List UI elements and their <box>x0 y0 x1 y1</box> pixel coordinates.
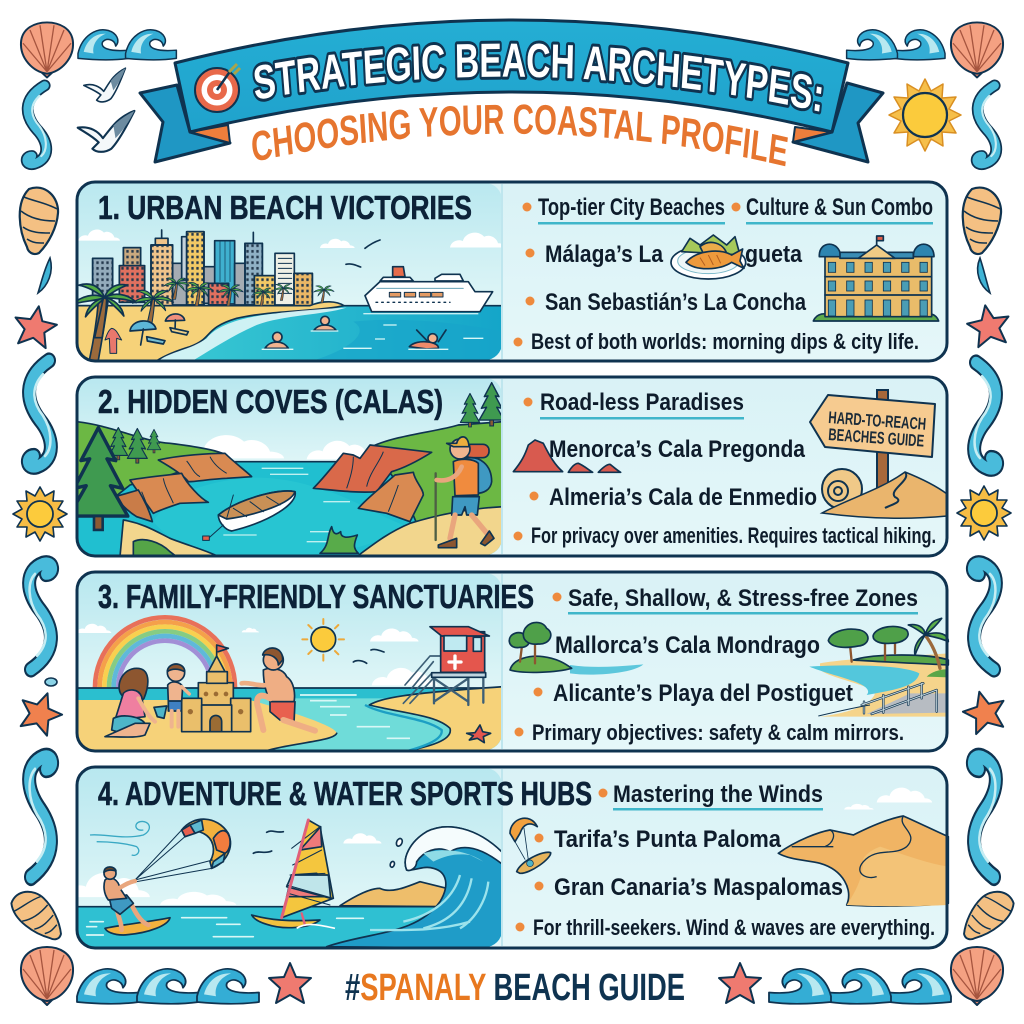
mother <box>105 668 167 737</box>
cruise ship <box>365 267 493 312</box>
illustration: cove with boat and hiker <box>69 375 504 562</box>
banner right tail <box>793 83 883 162</box>
illustration: kitesurf, windsurf and wave <box>67 765 503 948</box>
point: almeria: Almeria’s Cala de Enmedio <box>549 484 817 511</box>
heading: 1. URBAN BEACH VICTORIES <box>98 189 472 226</box>
signpost <box>810 390 935 492</box>
divider <box>501 574 503 749</box>
sun <box>302 619 344 661</box>
panel 3: family-friendly sanctuaries <box>70 570 948 755</box>
rowing boat <box>203 491 295 540</box>
divider <box>501 184 503 359</box>
panel border <box>77 377 947 556</box>
signpost: BEACHES GUIDE <box>828 425 925 451</box>
footer decoration: right <box>719 947 1003 1005</box>
summary line: For thrill-seekers. Wind & waves are everything. <box>533 915 935 940</box>
point: malaga <box>526 241 803 268</box>
divider <box>501 769 503 946</box>
icon: shell and dune <box>822 469 947 518</box>
big wave <box>327 827 503 948</box>
hiker <box>436 437 494 548</box>
footer decoration: left <box>21 947 311 1005</box>
illustration: family sandcastle <box>70 570 503 755</box>
beach umbrellas <box>105 314 188 353</box>
lifeguard tower <box>403 627 489 705</box>
heading: 2. HIDDEN COVES (CALAS) <box>98 383 443 420</box>
icon: palace <box>813 236 939 321</box>
point: malaga: Málaga’s La <box>545 241 664 268</box>
title line 1: STRATEGIC BEACH ARCHETYPES: <box>252 40 824 114</box>
point: road-less: Road-less Paradises <box>540 389 744 416</box>
icon: beach with trees and bridge <box>809 618 948 717</box>
title banner <box>138 18 885 166</box>
panel border <box>77 572 947 751</box>
icon: fish plate <box>671 235 746 279</box>
icon: tree islet left <box>509 622 643 675</box>
decoration: top left corner <box>21 22 176 164</box>
point: city beaches <box>522 194 725 224</box>
boy <box>167 664 189 727</box>
point: city beaches: Top-tier City Beaches <box>538 194 725 221</box>
icon: sand dunes <box>778 816 948 906</box>
title line 2: CHOOSING YOUR COASTAL PROFILE <box>252 104 788 166</box>
icon: mini kite and board <box>510 818 551 873</box>
point: culture and sun: Culture & Sun Combo <box>746 194 933 221</box>
panel border <box>77 767 947 948</box>
summary line: Best of both worlds: morning dips & city life. <box>531 329 919 354</box>
decoration: left border <box>5 188 72 947</box>
banner left tail <box>140 85 230 162</box>
point: malaga: gueta <box>745 241 803 268</box>
summary line: Primary objectives: safety & calm mirrors. <box>532 720 904 745</box>
banner right fold <box>793 127 832 142</box>
windsurfer <box>252 820 333 928</box>
banner body <box>175 20 848 132</box>
rainbow <box>95 617 235 687</box>
decoration: right border <box>953 188 1020 947</box>
signpost: HARD-TO-REACH <box>828 408 927 434</box>
point: menorca: Menorca’s Cala Pregonda <box>549 436 806 463</box>
heading: 3. FAMILY-FRIENDLY SANCTUARIES <box>98 578 534 615</box>
kitesurfer <box>104 867 170 935</box>
panel 2: hidden coves <box>69 375 947 562</box>
point: gran canaria: Gran Canaria’s Maspalomas <box>554 874 843 901</box>
icon: target <box>195 64 240 112</box>
point: tarifa: Tarifa’s Punta Paloma <box>554 826 782 853</box>
point: san sebastian: San Sebastián’s La Concha <box>545 289 807 316</box>
icon: red rocks <box>513 440 621 472</box>
clouds <box>844 788 932 809</box>
panel 1: urban beach victories <box>70 175 947 362</box>
decoration: top right corner <box>847 22 1003 164</box>
banner left fold <box>190 125 230 143</box>
footer text: #SPANALY BEACH GUIDE <box>345 967 685 1009</box>
point: mastering winds: Mastering the Winds <box>613 781 823 808</box>
swimmers <box>265 316 446 349</box>
panel 4: adventure and water sports <box>67 765 948 948</box>
point: safe shallow: Safe, Shallow, & Stress-free Zones <box>568 585 918 612</box>
panel border <box>77 182 947 361</box>
heading: 4. ADVENTURE & WATER SPORTS HUBS <box>98 775 592 812</box>
point: alicante: Alicante’s Playa del Postiguet <box>553 680 853 707</box>
point: mallorca: Mallorca’s Cala Mondrago <box>555 632 820 659</box>
divider <box>501 379 503 554</box>
sandcastle <box>182 645 251 732</box>
point: culture and sun <box>732 194 933 224</box>
kite <box>135 819 230 882</box>
illustration: city beach <box>70 175 505 362</box>
father <box>242 648 315 731</box>
